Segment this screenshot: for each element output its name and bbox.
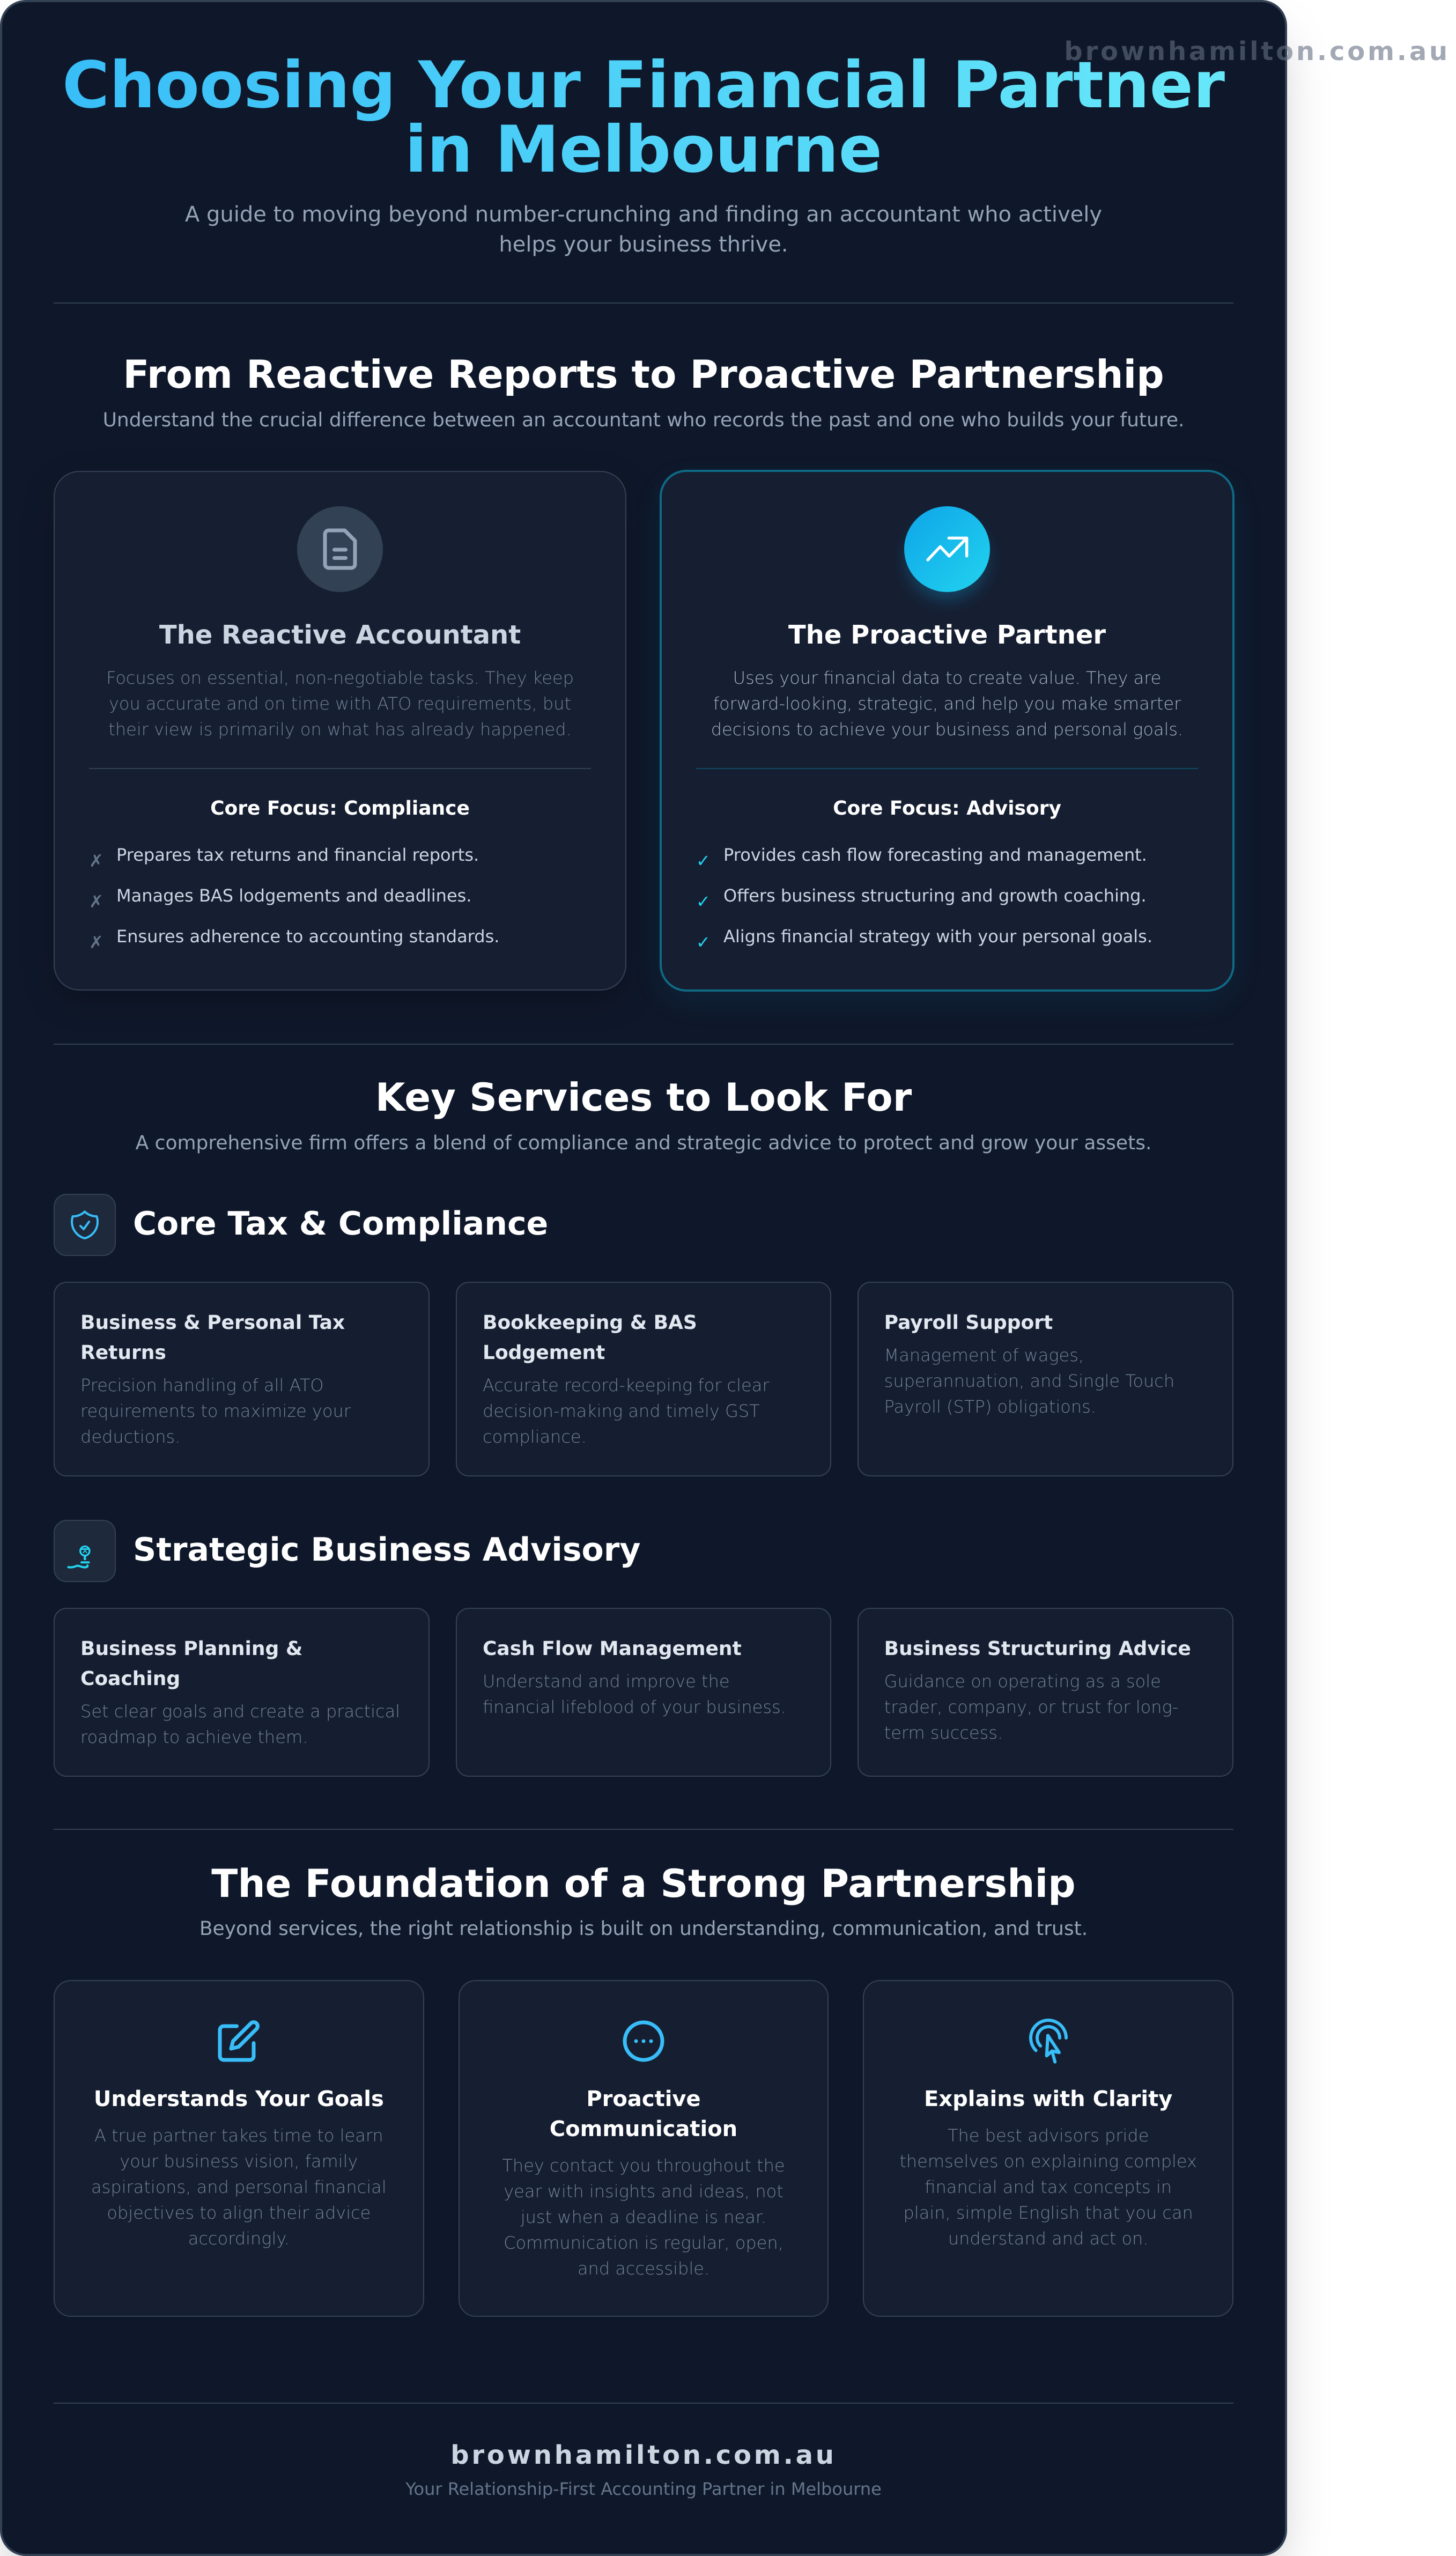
list item: cash flow: Provides cash flow forecasting and management. xyxy=(723,845,1147,865)
heading: strategic business advisory: Strategic Business Advisory xyxy=(133,1531,640,1569)
icon: cursor ripple xyxy=(1029,2019,1068,2064)
text: reactive description: Focuses on essential, non-negotiable tasks. They keep you accurate and on time with ATO requirements, but their view is primarily on what has already happened. xyxy=(106,668,574,740)
panel: explains with clarity: Explains with Clarity xyxy=(924,2087,1172,2111)
text: foundation intro: Beyond services, the right relationship is built on understanding, communication, and trust. xyxy=(199,1918,1088,1940)
panel: business structuring advice xyxy=(858,1608,1233,1777)
panel: business planning and coaching: Set clear goals and create a practical roadmap to achieve them. xyxy=(80,1701,400,1747)
icon: document xyxy=(297,506,383,592)
text: section intro: Understand the crucial difference between an accountant who records the past and one who builds your future. xyxy=(103,409,1184,431)
heading: key services: Key Services to Look For xyxy=(375,1075,912,1120)
text: proactive description: Uses your financial data to create value. They are forward-looking, strategic, and help you make smarter decisions to achieve your business and personal goals. xyxy=(711,668,1183,740)
panel: the proactive partner xyxy=(661,471,1233,991)
watermark: brownhamilton.com.au xyxy=(1064,36,1450,67)
footer brand: brownhamilton.com.au xyxy=(450,2440,837,2470)
panel: cash flow management: Understand and improve the financial lifeblood of your business. xyxy=(483,1671,786,1717)
icon: trending up xyxy=(904,506,990,592)
subtitle: A guide to moving beyond number-crunching and finding an accountant who actively helps your business thrive. xyxy=(185,202,1102,257)
panel: understands your goals: A true partner takes time to learn your business vision, family aspirations, and personal financial objectives to align their advice accordingly. xyxy=(91,2125,387,2249)
list item: BAS: ✗ xyxy=(89,891,104,912)
panel: proactive communication: They contact you throughout the year with insights and ideas, not just when a deadline is near. Communication is regular, open, and accessible. xyxy=(502,2155,785,2279)
list item: standards: Ensures adherence to accounting standards. xyxy=(116,926,499,947)
panel: proactive communication xyxy=(459,1980,829,2317)
panel: the reactive accountant xyxy=(54,471,626,991)
panel: business structuring advice: Guidance on operating as a sole trader, company, or trust for long-term success. xyxy=(884,1671,1178,1743)
heading: core focus compliance: Core Focus: Compliance xyxy=(210,797,470,819)
list item: tax returns: ✗ xyxy=(89,851,104,871)
panel: explains with clarity: The best advisors pride themselves on explaining complex financial and tax concepts in plain, simple English that you can understand and act on. xyxy=(899,2125,1197,2249)
list item: tax returns: Prepares tax returns and financial reports. xyxy=(116,845,479,865)
list item: strategy: Aligns financial strategy with your personal goals. xyxy=(723,926,1152,947)
panel: cash flow management: Cash Flow Management xyxy=(483,1638,742,1660)
panel: business planning and coaching: Business Planning & Coaching xyxy=(80,1638,302,1690)
panel: explains with clarity xyxy=(863,1980,1233,2317)
icon: pencil xyxy=(218,2020,260,2062)
panel: payroll support: Management of wages, superannuation, and Single Touch Payroll (STP) obligations. xyxy=(884,1345,1174,1417)
panel: business and personal tax returns: Precision handling of all ATO requirements to maximize your deductions. xyxy=(80,1375,351,1447)
heading: proactive partner: The Proactive Partner xyxy=(788,620,1106,650)
panel: business planning and coaching xyxy=(54,1608,430,1777)
panel: understands your goals xyxy=(54,1980,424,2317)
panel: bookkeeping and BAS lodgement: Bookkeeping & BAS Lodgement xyxy=(483,1312,697,1364)
icon: chat ellipsis xyxy=(623,2021,664,2062)
heading: core focus advisory: Core Focus: Advisory xyxy=(833,797,1061,819)
heading: from reactive to proactive: From Reactive Reports to Proactive Partnership xyxy=(123,352,1164,397)
heading: foundation of a strong partnership: The Foundation of a Strong Partnership xyxy=(211,1861,1076,1906)
list item: standards: ✗ xyxy=(89,932,104,952)
footer tagline: Your Relationship-First Accounting Partner in Melbourne xyxy=(405,2479,882,2499)
list item: strategy: ✓ xyxy=(696,932,711,952)
panel: proactive communication: Proactive Communication xyxy=(550,2087,737,2141)
panel: bookkeeping and BAS lodgement xyxy=(456,1282,831,1476)
panel: business and personal tax returns: Business & Personal Tax Returns xyxy=(80,1312,345,1364)
panel: business and personal tax returns xyxy=(54,1282,430,1476)
list item: BAS: Manages BAS lodgements and deadlines. xyxy=(116,885,471,906)
list item: structuring: Offers business structuring and growth coaching. xyxy=(723,885,1147,906)
list item: cash flow: ✓ xyxy=(696,851,711,871)
panel: payroll support xyxy=(858,1282,1233,1476)
text: key services intro: A comprehensive firm offers a blend of compliance and strategic advice to protect and grow your assets. xyxy=(136,1132,1151,1154)
panel: business structuring advice: Business Structuring Advice xyxy=(884,1638,1191,1660)
heading: reactive accountant: The Reactive Accountant xyxy=(159,620,521,650)
panel: bookkeeping and BAS lodgement: Accurate record-keeping for clear decision-making and timely GST compliance. xyxy=(483,1375,769,1447)
icon: strategic advisory xyxy=(54,1520,116,1582)
icon: shield check xyxy=(54,1194,116,1256)
list item: structuring: ✓ xyxy=(696,891,711,912)
title: Choosing Your Financial Partner in Melbourne xyxy=(62,48,1225,187)
panel: cash flow management xyxy=(456,1608,831,1777)
panel: payroll support: Payroll Support xyxy=(884,1312,1053,1334)
panel: understands your goals: Understands Your Goals xyxy=(94,2087,384,2111)
heading: core tax and compliance: Core Tax & Compliance xyxy=(133,1205,548,1243)
